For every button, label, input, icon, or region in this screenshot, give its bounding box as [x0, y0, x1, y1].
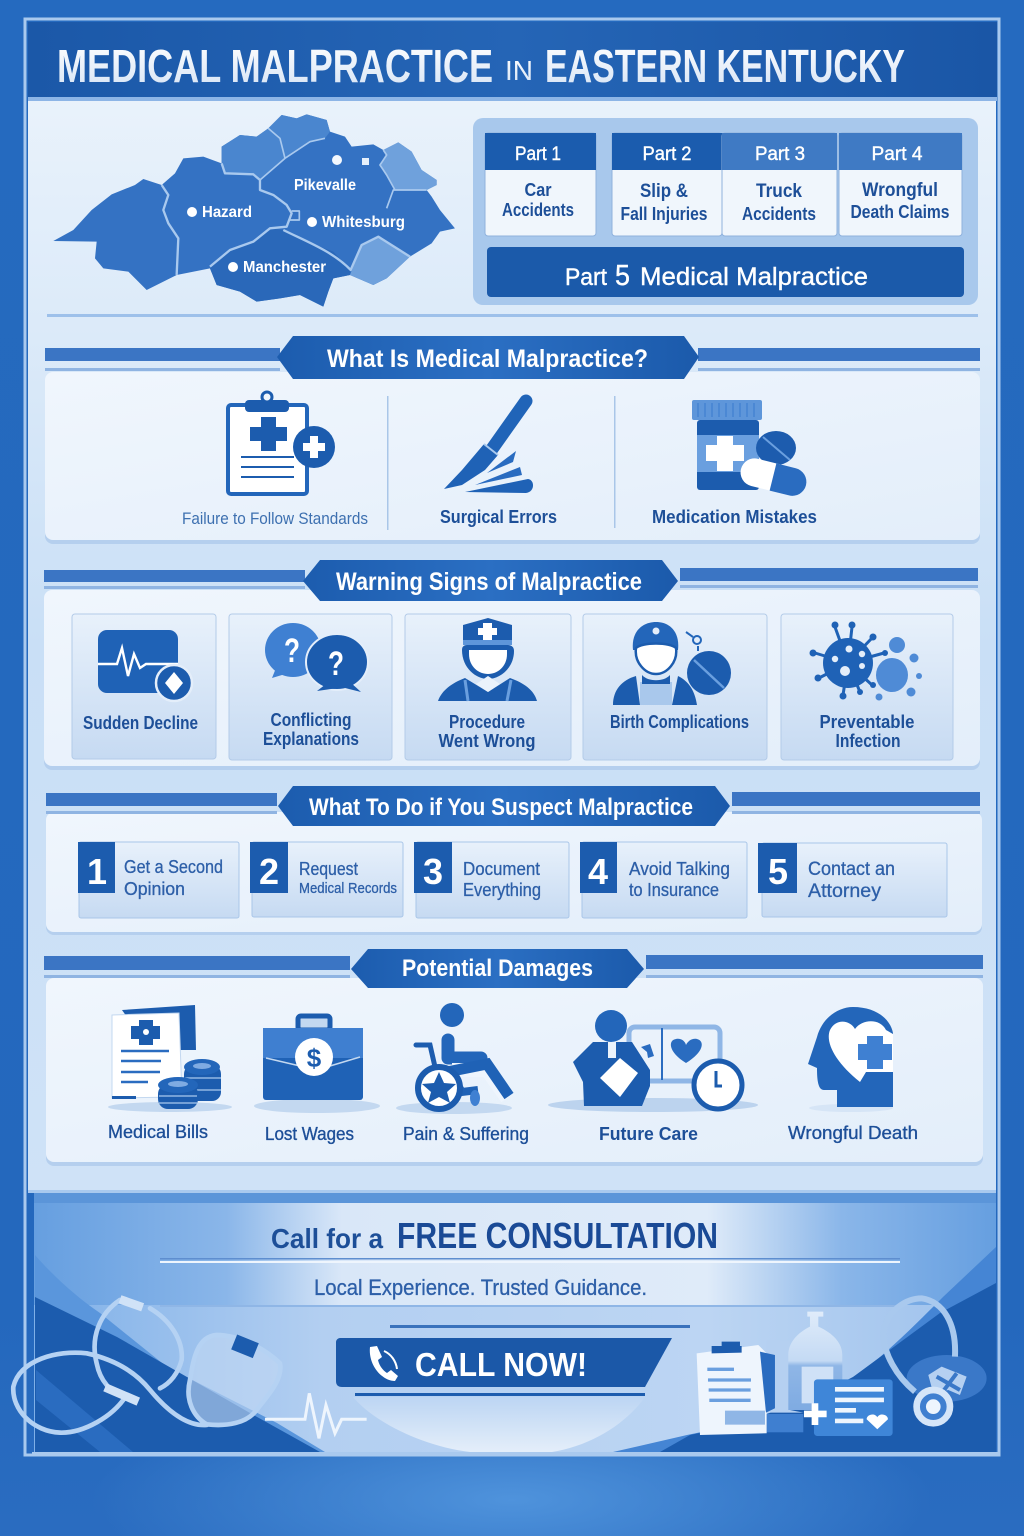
icon: medical supplies right	[697, 1312, 893, 1436]
icon: head with heart	[808, 1007, 893, 1107]
heading: What Is Medical Malpractice?	[327, 345, 648, 373]
step 3: 3	[423, 851, 443, 892]
item: wrongful death	[788, 1007, 918, 1143]
card: birth complications	[583, 614, 767, 760]
icon: stethoscope left	[13, 1299, 367, 1438]
panel: warning signs	[44, 560, 980, 770]
ecg line	[265, 1393, 367, 1438]
part 1 card: Car	[524, 180, 552, 200]
step 1	[78, 842, 239, 918]
part 5 bar: Medical Malpractice	[640, 263, 868, 291]
decorative corner wedges	[35, 1247, 996, 1452]
heading	[303, 560, 678, 601]
step 2: Medical Records	[299, 880, 397, 897]
part 4 card: Death Claims	[850, 202, 950, 222]
icon: surgeon	[438, 618, 537, 701]
item: pain and suffering	[396, 1003, 529, 1144]
heading: Warning Signs of Malpractice	[336, 568, 642, 596]
part 2 card: Part 2	[642, 144, 692, 165]
map label: Manchester: Manchester	[243, 259, 326, 276]
map label: Hazard: Hazard	[202, 204, 252, 221]
icon: question bubbles: ?	[328, 645, 344, 683]
part 3 card: Truck	[756, 181, 802, 202]
part 5 bar: 5	[615, 260, 630, 292]
label: Surgical Errors	[440, 507, 557, 527]
step 3: Document	[463, 859, 540, 879]
heading: What To Do if You Suspect Malpractice	[309, 794, 693, 821]
item: future care: Future Care	[599, 1124, 698, 1144]
card: preventable infection: Infection	[836, 731, 900, 751]
step 3	[414, 842, 569, 918]
title: IN	[505, 55, 533, 86]
card: procedure went wrong: Went Wrong	[438, 731, 536, 751]
card: procedure went wrong: Procedure	[449, 712, 525, 732]
part 3 card	[722, 133, 837, 236]
step 5: Contact an	[808, 859, 895, 880]
step 5: 5	[768, 851, 788, 892]
icon: doctor with pill	[613, 622, 731, 705]
part 5 bar: Part	[565, 264, 607, 291]
main sheet	[28, 100, 996, 1192]
panel: series parts	[473, 118, 978, 305]
step 4: to Insurance	[629, 880, 719, 900]
step 3: Everything	[463, 880, 541, 900]
item: pain and suffering: Pain & Suffering	[403, 1124, 529, 1144]
card: conflicting explanations: Explanations	[263, 729, 359, 749]
card: conflicting explanations: Conflicting	[270, 710, 352, 730]
part 1 card: Part 1	[515, 144, 561, 165]
part 4 card: Part 4	[872, 144, 923, 165]
part 1 card: Accidents	[502, 200, 574, 220]
card: sudden decline: Sudden Decline	[83, 713, 198, 733]
icon: briefcase: $	[307, 1043, 322, 1073]
item: future care	[548, 1010, 758, 1144]
card: conflicting explanations	[229, 614, 392, 760]
part 2 card: Slip &	[640, 181, 688, 202]
title: MEDICAL MALPRACTICE	[57, 40, 493, 92]
step 1: 1	[87, 851, 107, 892]
icon: caregiver, screen and clock	[573, 1010, 742, 1109]
title	[57, 40, 905, 92]
card: preventable infection	[781, 614, 953, 760]
panel: what to do	[46, 786, 982, 935]
card: sudden decline	[72, 614, 216, 759]
panel: call to action	[13, 1190, 996, 1454]
label: Medication Mistakes	[652, 507, 817, 527]
frame base	[32, 1452, 1000, 1456]
tagline: Local Experience. Trusted Guidance.	[314, 1275, 647, 1300]
call now button: CALL NOW!	[415, 1346, 587, 1383]
icon: wheelchair	[416, 1003, 509, 1109]
card: preventable infection: Preventable	[820, 712, 914, 732]
step 4: Avoid Talking	[629, 859, 730, 879]
heading	[277, 336, 699, 379]
icon: virus	[810, 622, 922, 700]
part 3 card: Part 3	[755, 144, 805, 165]
item: lost wages: Lost Wages	[265, 1124, 354, 1144]
step 4	[580, 842, 747, 918]
headline	[271, 1215, 718, 1256]
icon: question bubbles: ?	[284, 632, 300, 670]
panel: what is medical malpractice	[45, 336, 980, 544]
heading: Potential Damages	[402, 955, 593, 982]
icon: scalpel	[444, 401, 533, 493]
icon: question bubbles	[265, 623, 368, 692]
step 4: 4	[588, 851, 608, 892]
step 5: Attorney	[808, 881, 882, 902]
icon: bills and coins	[112, 1005, 221, 1109]
step 2	[250, 842, 403, 917]
icon: stethoscope right	[883, 1298, 987, 1423]
part 1 card	[485, 133, 596, 236]
item: medical bills: Medical Bills	[108, 1122, 208, 1142]
part 2 card	[612, 133, 722, 236]
step 1: Get a Second	[124, 857, 223, 877]
map label: Whitesburg: Whitesburg	[322, 214, 405, 231]
call now button	[336, 1338, 672, 1387]
step 2: 2	[259, 851, 279, 892]
headline: FREE CONSULTATION	[397, 1215, 718, 1256]
step 2: Request	[299, 859, 358, 879]
card: procedure went wrong	[405, 614, 571, 760]
part 2 card: Fall Injuries	[620, 204, 708, 224]
map label: Pikevalle: Pikevalle	[294, 177, 356, 194]
label: Failure to Follow Standards	[182, 509, 368, 528]
step 1: Opinion	[124, 879, 185, 899]
map of eastern Kentucky	[53, 114, 455, 307]
icon: phone	[370, 1346, 398, 1381]
card: birth complications: Birth Complications	[610, 712, 749, 732]
item: wrongful death: Wrongful Death	[788, 1123, 918, 1143]
icon: medicine bottle and pills	[692, 400, 809, 499]
step 5	[758, 843, 947, 917]
part 4 card: Wrongful	[862, 180, 938, 201]
item: lost wages	[254, 1016, 380, 1144]
item: medical bills	[108, 1005, 232, 1142]
heading	[278, 786, 730, 826]
part 3 card: Accidents	[742, 204, 816, 224]
title banner	[28, 22, 997, 101]
icon: monitor	[98, 630, 192, 701]
heading	[351, 949, 644, 988]
panel: potential damages	[44, 949, 983, 1166]
part 5 bar	[487, 247, 964, 297]
map label: Pikevalle	[294, 155, 369, 194]
headline: Call for a	[271, 1223, 383, 1254]
part 4 card	[839, 133, 962, 236]
title: EASTERN KENTUCKY	[545, 40, 905, 92]
icon: clipboard	[228, 392, 335, 494]
